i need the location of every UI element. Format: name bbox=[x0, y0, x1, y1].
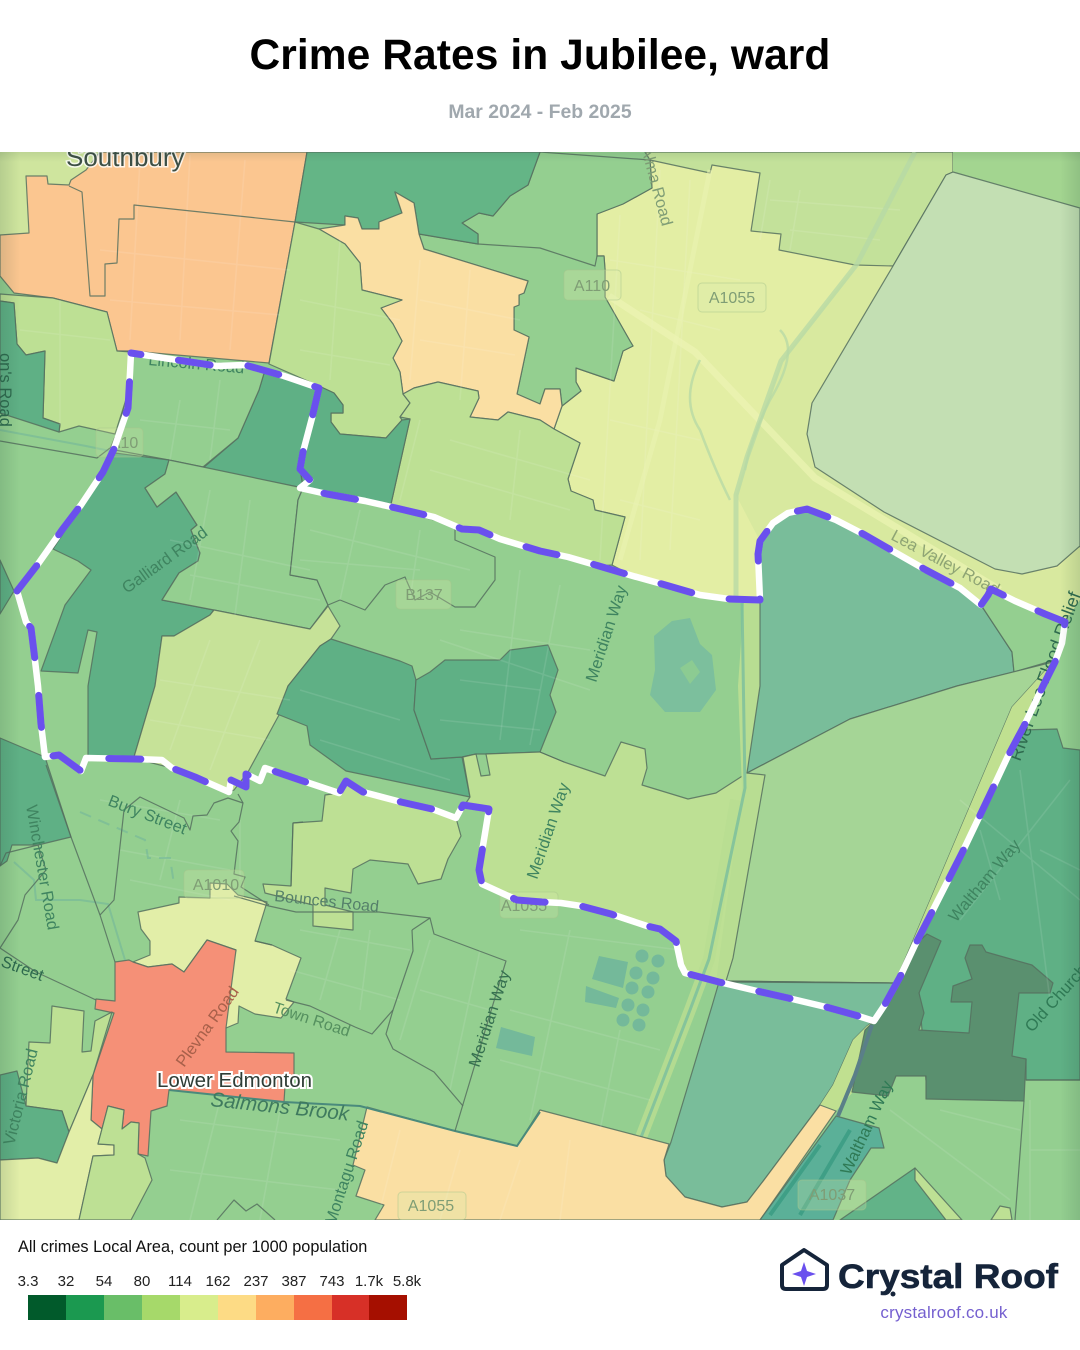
feature: streams bbox=[0, 430, 174, 960]
area: south-west dark bbox=[0, 738, 71, 866]
logo: Crystal Roof bbox=[780, 1248, 1059, 1296]
road shields bbox=[96, 270, 866, 1220]
area: town pale yellow bbox=[133, 883, 301, 1028]
place label: Salmons Brook: Salmons Brook bbox=[209, 1088, 352, 1126]
area: east green bbox=[915, 726, 1080, 1080]
road shields: A110 bbox=[574, 278, 610, 295]
feature: pond in park bbox=[650, 618, 716, 712]
area: south-west dark bbox=[0, 1071, 69, 1163]
area: east pale stripe bbox=[906, 668, 1048, 956]
feature: river navigation bbox=[690, 152, 915, 600]
area: north-west corner pale bbox=[0, 152, 99, 234]
legend: 114 bbox=[168, 1273, 192, 1290]
road name labels: Bury Street bbox=[106, 792, 189, 838]
area: pale south of mid green bbox=[134, 606, 340, 792]
area: ward mid green bbox=[145, 460, 328, 629]
road name labels: Victoria Road bbox=[0, 1047, 42, 1147]
area: pale south ward block bbox=[263, 781, 461, 930]
area: peach north bbox=[319, 192, 562, 429]
area: dark centre left block bbox=[277, 639, 470, 797]
area: north-east corner bbox=[953, 152, 1080, 209]
area: east lake field bbox=[726, 662, 1053, 983]
road name labels: Meridian Way bbox=[583, 583, 631, 684]
area: north mid green bbox=[419, 152, 652, 406]
legend: 1.7k bbox=[355, 1273, 384, 1290]
road name labels: Meridian Way bbox=[524, 780, 574, 881]
feature: east boundary edge bbox=[838, 1025, 872, 1116]
area: south-west pale green bbox=[26, 1006, 112, 1132]
feature: teal sliver streaks bbox=[770, 1130, 850, 1215]
website link: crystalroof.co.uk bbox=[880, 1303, 1008, 1322]
area: pale south field bbox=[456, 742, 747, 982]
area: band beside reservoir bbox=[736, 266, 1080, 622]
boundary lines bbox=[0, 186, 1080, 1220]
road name labels: Waltham Way bbox=[837, 1077, 897, 1178]
legend: 237 bbox=[243, 1273, 269, 1290]
area: pale green centre north bbox=[391, 382, 625, 566]
road name labels: Waltham Way bbox=[945, 836, 1025, 926]
road name labels: Lea Valley Road bbox=[888, 527, 1002, 599]
feature: pond island bbox=[680, 660, 700, 684]
area: centre-north block bbox=[290, 488, 495, 610]
road shields: A10 bbox=[110, 435, 138, 452]
legend: 3.3 bbox=[18, 1273, 38, 1290]
area: lake east green bbox=[982, 594, 1052, 672]
choropleth map bbox=[0, 152, 1080, 1220]
area: dark south-east bbox=[852, 934, 1053, 1101]
ward boundary: Jubilee bbox=[17, 353, 1065, 1021]
road shields: A1010 bbox=[193, 877, 239, 894]
area: south-east small pale bbox=[991, 1206, 1012, 1220]
area: pale strip beside south lake bbox=[820, 1021, 874, 1111]
area: dark north bbox=[295, 152, 540, 244]
road name labels: Town Road bbox=[271, 1000, 352, 1041]
area: bottom-left pale yellow bbox=[0, 1075, 114, 1220]
legend title: All crimes Local Area, count per 1000 population bbox=[18, 1238, 367, 1256]
subtitle: date range: Mar 2024 - Feb 2025 bbox=[448, 101, 632, 123]
place label: Lower Edmonton: Lower Edmonton bbox=[157, 1070, 312, 1092]
wordmark: Crystal Roof bbox=[838, 1258, 1059, 1296]
area: north-east green block bbox=[645, 152, 953, 266]
road shields: A1055 bbox=[709, 290, 755, 307]
area: far-west dark bbox=[0, 301, 60, 432]
road name labels: Alma Road bbox=[637, 144, 676, 228]
area: north lake bbox=[747, 509, 1014, 773]
area: south lake bbox=[664, 982, 895, 1207]
map edge vignette bbox=[0, 152, 1080, 1220]
road name labels: Plevna Road bbox=[173, 983, 243, 1070]
area: east of ward green bbox=[1067, 600, 1080, 620]
legend: 54 bbox=[96, 1273, 112, 1290]
road name labels: Winchester Road bbox=[22, 804, 62, 931]
area: north-east pale yellow bbox=[554, 152, 1080, 622]
feature: square pond bbox=[496, 1027, 535, 1056]
area: ward top left bbox=[117, 374, 264, 467]
icon: house with star bbox=[782, 1250, 827, 1289]
legend: 162 bbox=[205, 1273, 231, 1290]
legend: 32 bbox=[58, 1273, 74, 1290]
feature: north-south road bbox=[620, 170, 710, 560]
road shields: A1055 bbox=[408, 1198, 454, 1215]
area: orange north-west bbox=[0, 152, 307, 363]
area: bottom-left pale green bbox=[79, 1106, 152, 1220]
feature: diagonal road bbox=[609, 296, 1000, 590]
legend: 387 bbox=[281, 1273, 307, 1290]
road shields: A1037 bbox=[809, 1187, 855, 1204]
area: south-east triangle bbox=[840, 1168, 946, 1220]
road shields: A1055 bbox=[501, 898, 547, 915]
area: south peach bbox=[353, 1105, 836, 1220]
legend bbox=[18, 1273, 422, 1320]
area: river pale band bbox=[724, 603, 764, 980]
streets overlay bbox=[20, 155, 1080, 1220]
area: teal sliver bbox=[760, 1116, 884, 1220]
road name labels: Bounces Road bbox=[274, 888, 380, 916]
area: west pale green bbox=[0, 294, 131, 434]
area: pale green north bbox=[269, 222, 410, 438]
feature: Salmons Brook line bbox=[169, 1090, 540, 1146]
road name labels: Street bbox=[0, 953, 47, 985]
title: Crime Rates in Jubilee, ward bbox=[250, 32, 830, 79]
road shields: B137 bbox=[405, 587, 443, 604]
area: west triangle bbox=[0, 560, 14, 614]
road name labels: Galliard Road bbox=[119, 523, 211, 597]
area: dark centre right block bbox=[414, 645, 558, 759]
area: Lower Edmonton salmon bbox=[91, 940, 294, 1156]
area: south-east pale strip bbox=[915, 1168, 962, 1220]
legend: 743 bbox=[319, 1273, 345, 1290]
road name labels: Meridian Way bbox=[466, 968, 514, 1069]
road name labels: Lincoln Road bbox=[148, 351, 245, 377]
area: dark block right of ward bbox=[300, 386, 410, 504]
legend: 5.8k bbox=[393, 1273, 422, 1290]
area: ward top dark block bbox=[203, 370, 319, 488]
area: reservoir bbox=[807, 172, 1080, 574]
place label: Southbury: Southbury bbox=[66, 142, 185, 172]
area: Galliard Road dark band bbox=[41, 453, 214, 757]
legend: 80 bbox=[134, 1273, 150, 1290]
feature: sports courts bbox=[585, 950, 664, 1032]
area: river stripes south bbox=[636, 603, 746, 1138]
